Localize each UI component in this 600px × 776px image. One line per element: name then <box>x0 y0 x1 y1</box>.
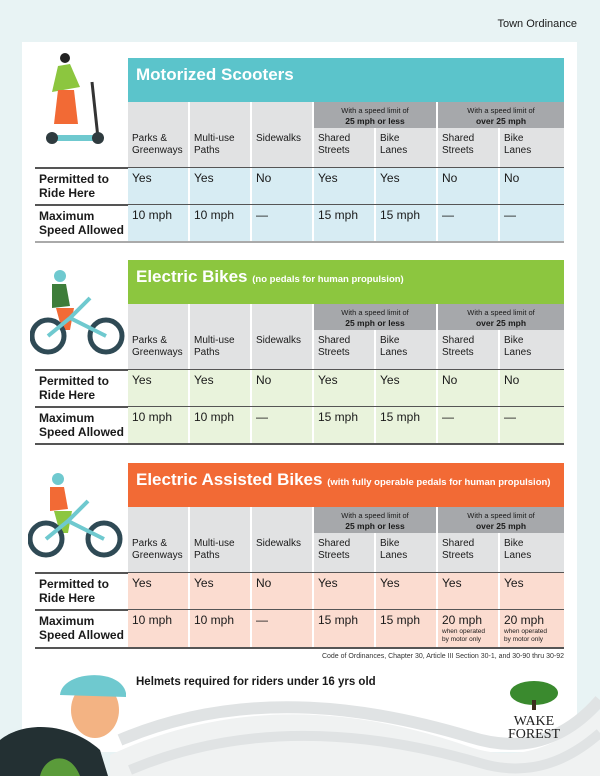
panel: electric bikes: Parks & <box>132 335 167 346</box>
panel: motorized scooters: Streets <box>442 145 474 156</box>
panel: electric assisted bikes: With a speed limit of <box>467 511 535 520</box>
panel: motorized scooters: Yes <box>132 171 152 185</box>
panel: electric assisted bikes: Lanes <box>380 550 407 561</box>
panel: motorized scooters: Yes <box>380 171 400 185</box>
heading: Electric Assisted Bikes (with fully operable pedals for human propulsion) <box>136 470 550 489</box>
panel: motorized scooters: Streets <box>318 145 350 156</box>
panel: electric assisted bikes: Yes <box>194 576 214 590</box>
icon: cyclist with helmet <box>0 675 126 776</box>
panel: electric assisted bikes: when operated <box>504 628 547 635</box>
panel: motorized scooters: — <box>442 208 454 222</box>
panel: electric assisted bikes: Speed Allowed <box>39 628 124 642</box>
heading: Motorized Scooters <box>136 65 294 84</box>
panel: electric bikes: Ride Here <box>39 388 95 402</box>
panel: motorized scooters: Speed Allowed <box>39 223 124 237</box>
icon: rider on assisted bike <box>28 473 122 558</box>
panel: motorized scooters <box>35 53 564 243</box>
panel: electric bikes: Yes <box>318 373 338 387</box>
panel: electric assisted bikes: Shared <box>318 538 350 549</box>
panel: electric assisted bikes <box>28 463 564 649</box>
panel: electric bikes: Streets <box>442 347 474 358</box>
panel: electric bikes: Lanes <box>380 347 407 358</box>
panel: electric assisted bikes: by motor only <box>504 636 543 643</box>
panel: electric bikes: With a speed limit of <box>341 308 409 317</box>
column headers <box>128 102 564 167</box>
panel: electric bikes: Sidewalks <box>256 335 301 346</box>
panel: electric assisted bikes: Sidewalks <box>256 538 301 549</box>
panel: motorized scooters: No <box>442 171 457 185</box>
panel: motorized scooters: Permitted to <box>39 172 109 186</box>
panel: electric bikes: 15 mph <box>318 410 358 424</box>
panel: electric bikes: Speed Allowed <box>39 425 124 439</box>
panel: motorized scooters: With a speed limit of <box>341 106 409 115</box>
logo: Wake Forest: WAKE <box>514 714 554 729</box>
panel: motorized scooters: Yes <box>194 171 214 185</box>
panel: electric assisted bikes: Bike <box>380 538 399 549</box>
column headers <box>128 507 564 572</box>
panel: motorized scooters: Shared <box>318 133 350 144</box>
panel: electric bikes: 15 mph <box>380 410 420 424</box>
panel: electric bikes: Bike <box>380 335 399 346</box>
panel: electric assisted bikes: 15 mph <box>318 613 358 627</box>
panel: electric assisted bikes: 20 mph <box>504 613 544 627</box>
heading: Electric Bikes (no pedals for human propulsion) <box>136 267 404 286</box>
panel: motorized scooters: Lanes <box>380 145 407 156</box>
panel: motorized scooters: Bike <box>504 133 523 144</box>
panel: electric bikes <box>30 260 564 445</box>
panel: motorized scooters: Sidewalks <box>256 133 301 144</box>
panel: electric bikes: Yes <box>132 373 152 387</box>
panel: electric bikes: Streets <box>318 347 350 358</box>
panel: electric assisted bikes: by motor only <box>442 636 481 643</box>
panel: motorized scooters: 25 mph or less <box>345 116 405 126</box>
panel: electric assisted bikes: when operated <box>442 628 485 635</box>
panel: electric assisted bikes: Yes <box>318 576 338 590</box>
panel: motorized scooters: Paths <box>194 145 220 156</box>
panel: electric assisted bikes: Yes <box>504 576 524 590</box>
heading <box>128 260 564 304</box>
panel: motorized scooters: Bike <box>380 133 399 144</box>
panel: motorized scooters: 10 mph <box>132 208 172 222</box>
rows <box>35 572 564 649</box>
panel: electric bikes: Greenways <box>132 347 183 358</box>
panel: electric assisted bikes: Yes <box>132 576 152 590</box>
panel: motorized scooters: — <box>256 208 268 222</box>
panel: electric bikes: Bike <box>504 335 523 346</box>
panel: electric bikes: Yes <box>380 373 400 387</box>
panel: electric assisted bikes: Multi-use <box>194 538 235 549</box>
panel: electric assisted bikes: Bike <box>504 538 523 549</box>
panel: electric assisted bikes: Lanes <box>504 550 531 561</box>
panel: electric assisted bikes: Greenways <box>132 550 183 561</box>
panel: electric assisted bikes: 15 mph <box>380 613 420 627</box>
panel: electric assisted bikes: 20 mph <box>442 613 482 627</box>
panel: electric assisted bikes: Ride Here <box>39 591 95 605</box>
background waves <box>118 696 600 774</box>
panel: motorized scooters: Greenways <box>132 145 183 156</box>
panel: motorized scooters: Shared <box>442 133 474 144</box>
rows <box>35 369 564 445</box>
panel: electric assisted bikes: 25 mph or less <box>345 521 405 531</box>
panel: motorized scooters: 15 mph <box>318 208 358 222</box>
panel: electric assisted bikes: Paths <box>194 550 220 561</box>
panel: electric bikes: Multi-use <box>194 335 235 346</box>
panel: electric assisted bikes: Yes <box>380 576 400 590</box>
panel: electric bikes: Maximum <box>39 411 94 425</box>
panel: electric bikes: With a speed limit of <box>467 308 535 317</box>
panel: electric bikes: 10 mph <box>132 410 172 424</box>
panel: electric assisted bikes: — <box>256 613 268 627</box>
panel: electric assisted bikes: Parks & <box>132 538 167 549</box>
panel: electric bikes: — <box>256 410 268 424</box>
panel: motorized scooters: No <box>504 171 519 185</box>
panel: electric assisted bikes: Streets <box>442 550 474 561</box>
panel: electric bikes: No <box>256 373 271 387</box>
panel: electric bikes: 25 mph or less <box>345 318 405 328</box>
heading <box>128 463 564 507</box>
panel: motorized scooters: Maximum <box>39 209 94 223</box>
panel: electric bikes: over 25 mph <box>476 318 526 328</box>
panel: electric bikes: Yes <box>194 373 214 387</box>
panel: motorized scooters: — <box>504 208 516 222</box>
panel: motorized scooters: No <box>256 171 271 185</box>
panel: electric bikes: No <box>442 373 457 387</box>
panel: electric bikes: No <box>504 373 519 387</box>
panel: electric assisted bikes: 10 mph <box>194 613 234 627</box>
panel: motorized scooters: 15 mph <box>380 208 420 222</box>
panel: electric assisted bikes: Permitted to <box>39 577 109 591</box>
panel: electric bikes: Paths <box>194 347 220 358</box>
header label: Town Ordinance: Town Ordinance <box>498 18 577 30</box>
panel: electric assisted bikes: No <box>256 576 271 590</box>
panel: motorized scooters: Multi-use <box>194 133 235 144</box>
panel: electric bikes: Shared <box>318 335 350 346</box>
panel: electric assisted bikes: Streets <box>318 550 350 561</box>
panel: motorized scooters: Ride Here <box>39 186 95 200</box>
heading <box>128 58 564 102</box>
panel: electric bikes: — <box>442 410 454 424</box>
panel: electric assisted bikes: Maximum <box>39 614 94 628</box>
panel: motorized scooters: Parks & <box>132 133 167 144</box>
panel: motorized scooters: Yes <box>318 171 338 185</box>
logo: Wake Forest <box>508 681 560 742</box>
rows <box>35 167 564 243</box>
panel: electric bikes: — <box>504 410 516 424</box>
icon: woman on scooter <box>46 53 104 144</box>
logo: Wake Forest: FOREST <box>508 727 560 742</box>
panel: motorized scooters: over 25 mph <box>476 116 526 126</box>
panel: electric bikes: 10 mph <box>194 410 234 424</box>
footnote: code citation: Code of Ordinances, Chapter 30, Article III Section 30-1, and 30-90 thru 30-92 <box>322 653 564 660</box>
panel: electric assisted bikes: Yes <box>442 576 462 590</box>
panel: electric assisted bikes: over 25 mph <box>476 521 526 531</box>
callout: helmets: Helmets required for riders under 16 yrs old <box>136 676 376 688</box>
panel: electric bikes: Permitted to <box>39 374 109 388</box>
panel: electric assisted bikes: 10 mph <box>132 613 172 627</box>
panel: electric assisted bikes: With a speed limit of <box>341 511 409 520</box>
icon: rider on e-bike <box>30 270 124 354</box>
panel: electric bikes: Lanes <box>504 347 531 358</box>
column headers <box>128 304 564 369</box>
panel: electric bikes: Shared <box>442 335 474 346</box>
panel: motorized scooters: Lanes <box>504 145 531 156</box>
panel: motorized scooters: 10 mph <box>194 208 234 222</box>
panel: electric assisted bikes: Shared <box>442 538 474 549</box>
panel: motorized scooters: With a speed limit of <box>467 106 535 115</box>
